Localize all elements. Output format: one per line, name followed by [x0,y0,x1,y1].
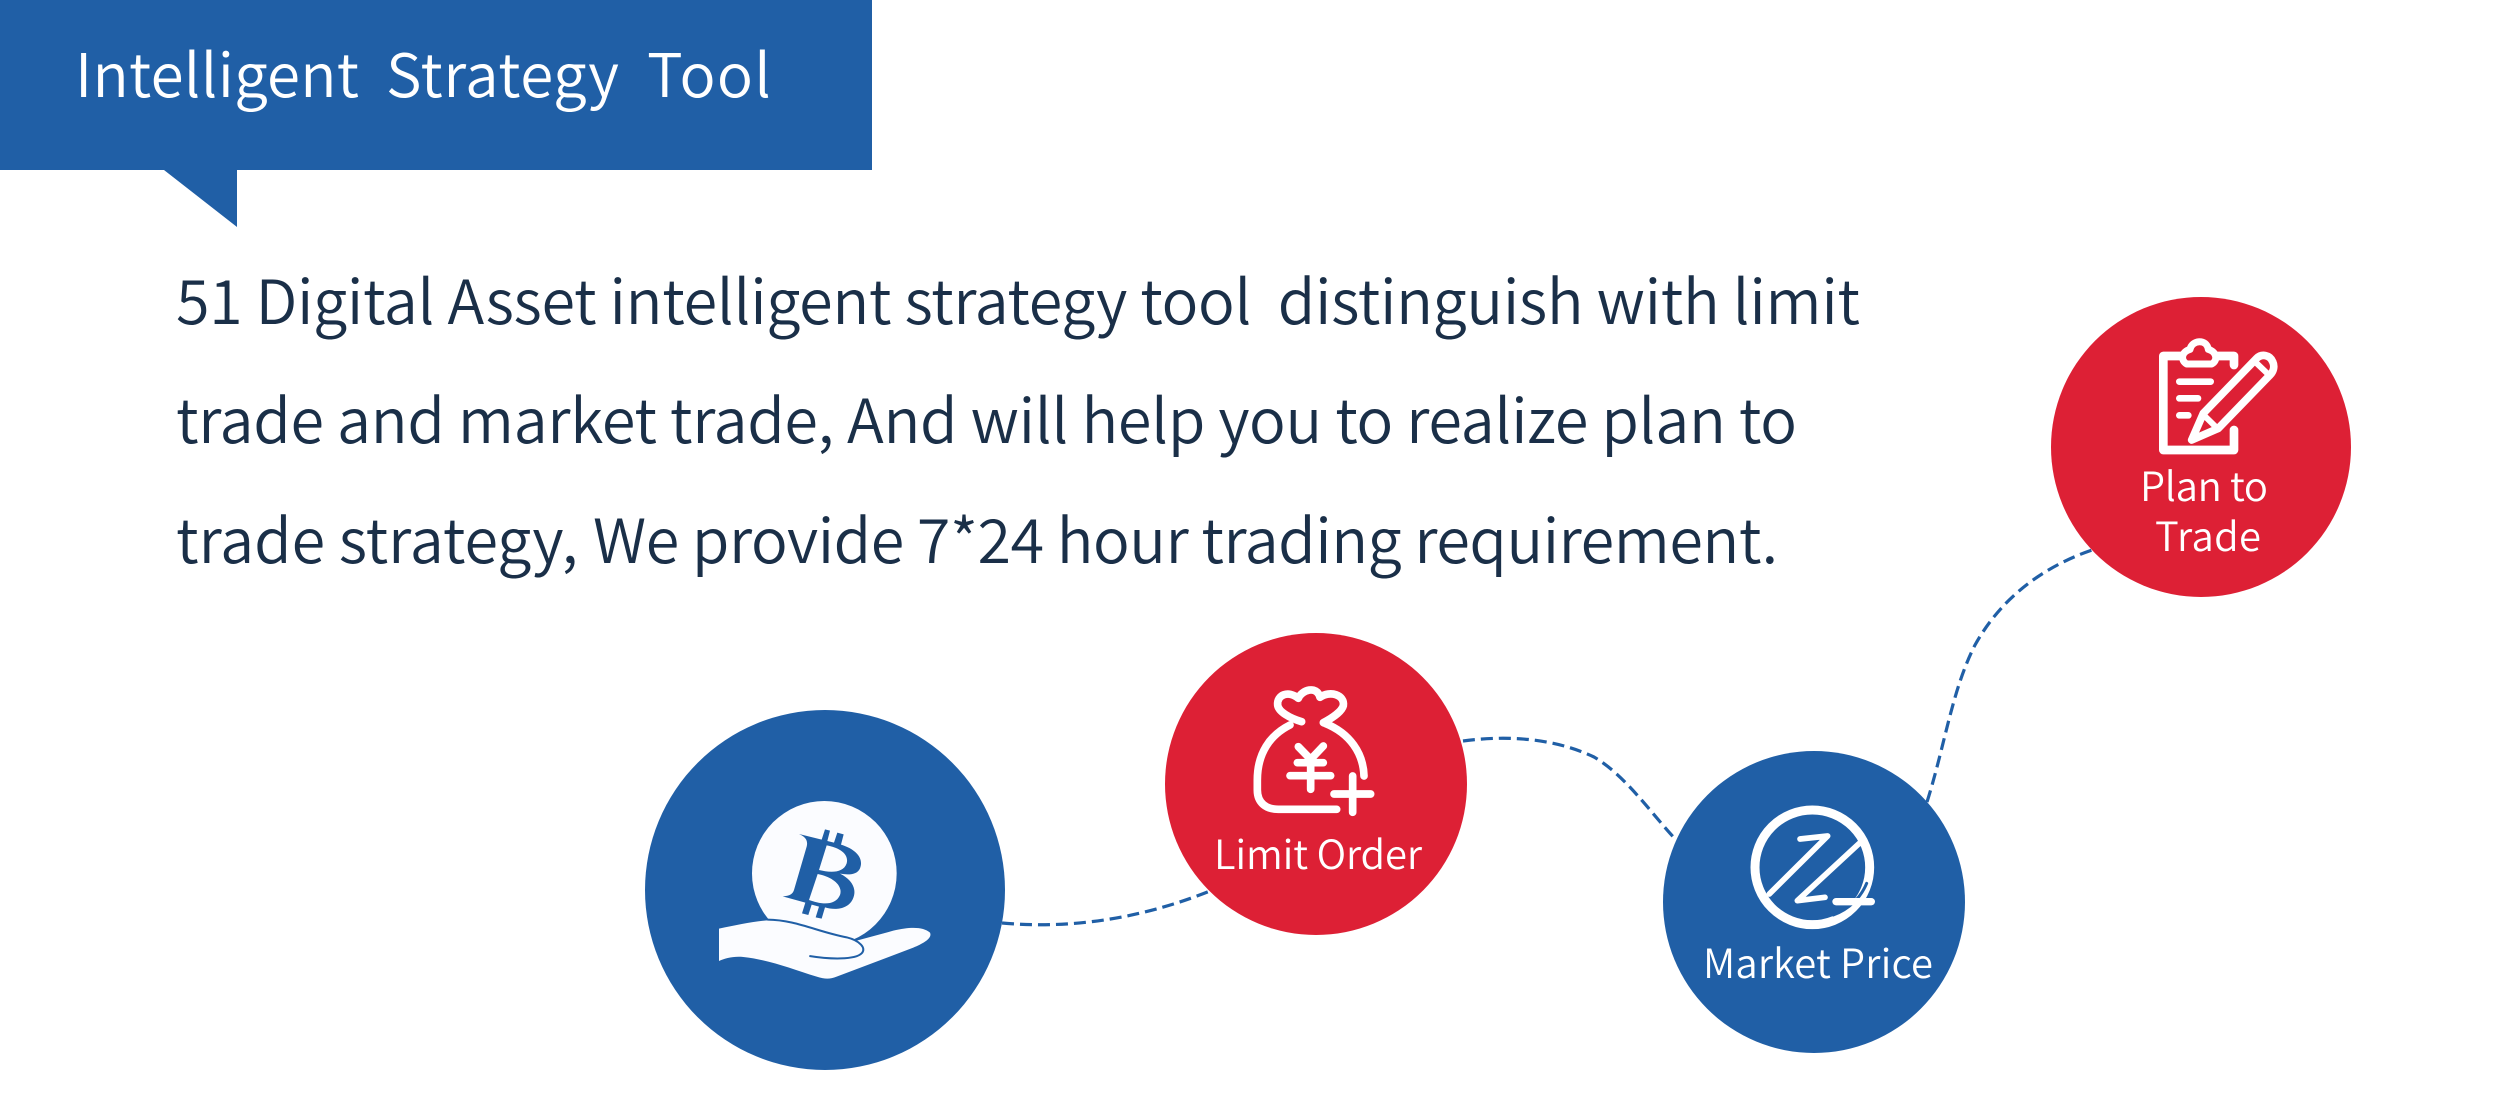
node: plan to trade [2051,297,2351,597]
node: market price [1663,751,1965,1053]
title: Intelligent [75,28,359,115]
label: Limit Order [1214,823,1423,881]
dashed connector: bitcoin to limit order [1002,891,1210,925]
title [75,28,771,115]
dashed connector: limit order to market price [1463,738,1677,841]
label [2140,455,2268,563]
label: Plan to [2140,455,2268,513]
intro text block: trade strategy, [176,492,578,581]
header banner [0,0,872,227]
intro text block: trade and market trade, And will help you to realize plan to [176,372,1797,461]
node: bitcoin in hand [645,710,1005,1070]
icon: clipboard and pencil [2163,342,2274,450]
icon: money bag with yen and plus [1257,690,1371,812]
intro text block: We provide 7*24 hour trading requirement. [593,492,1778,581]
label: Market Price [1703,932,1933,990]
label: Trade [2155,505,2261,563]
title: Strategy [386,28,619,115]
title: Tool [647,28,771,115]
intro text block: 51 Digital Asset intelligent strategy tool distinguish with limit [176,253,1860,342]
icon: hand holding bitcoin [719,801,930,979]
dashed connector: market price to plan to trade [1927,550,2092,802]
intro text block [176,253,1860,581]
icon: circular price symbol [1755,810,1871,925]
node: limit order [1165,633,1467,935]
